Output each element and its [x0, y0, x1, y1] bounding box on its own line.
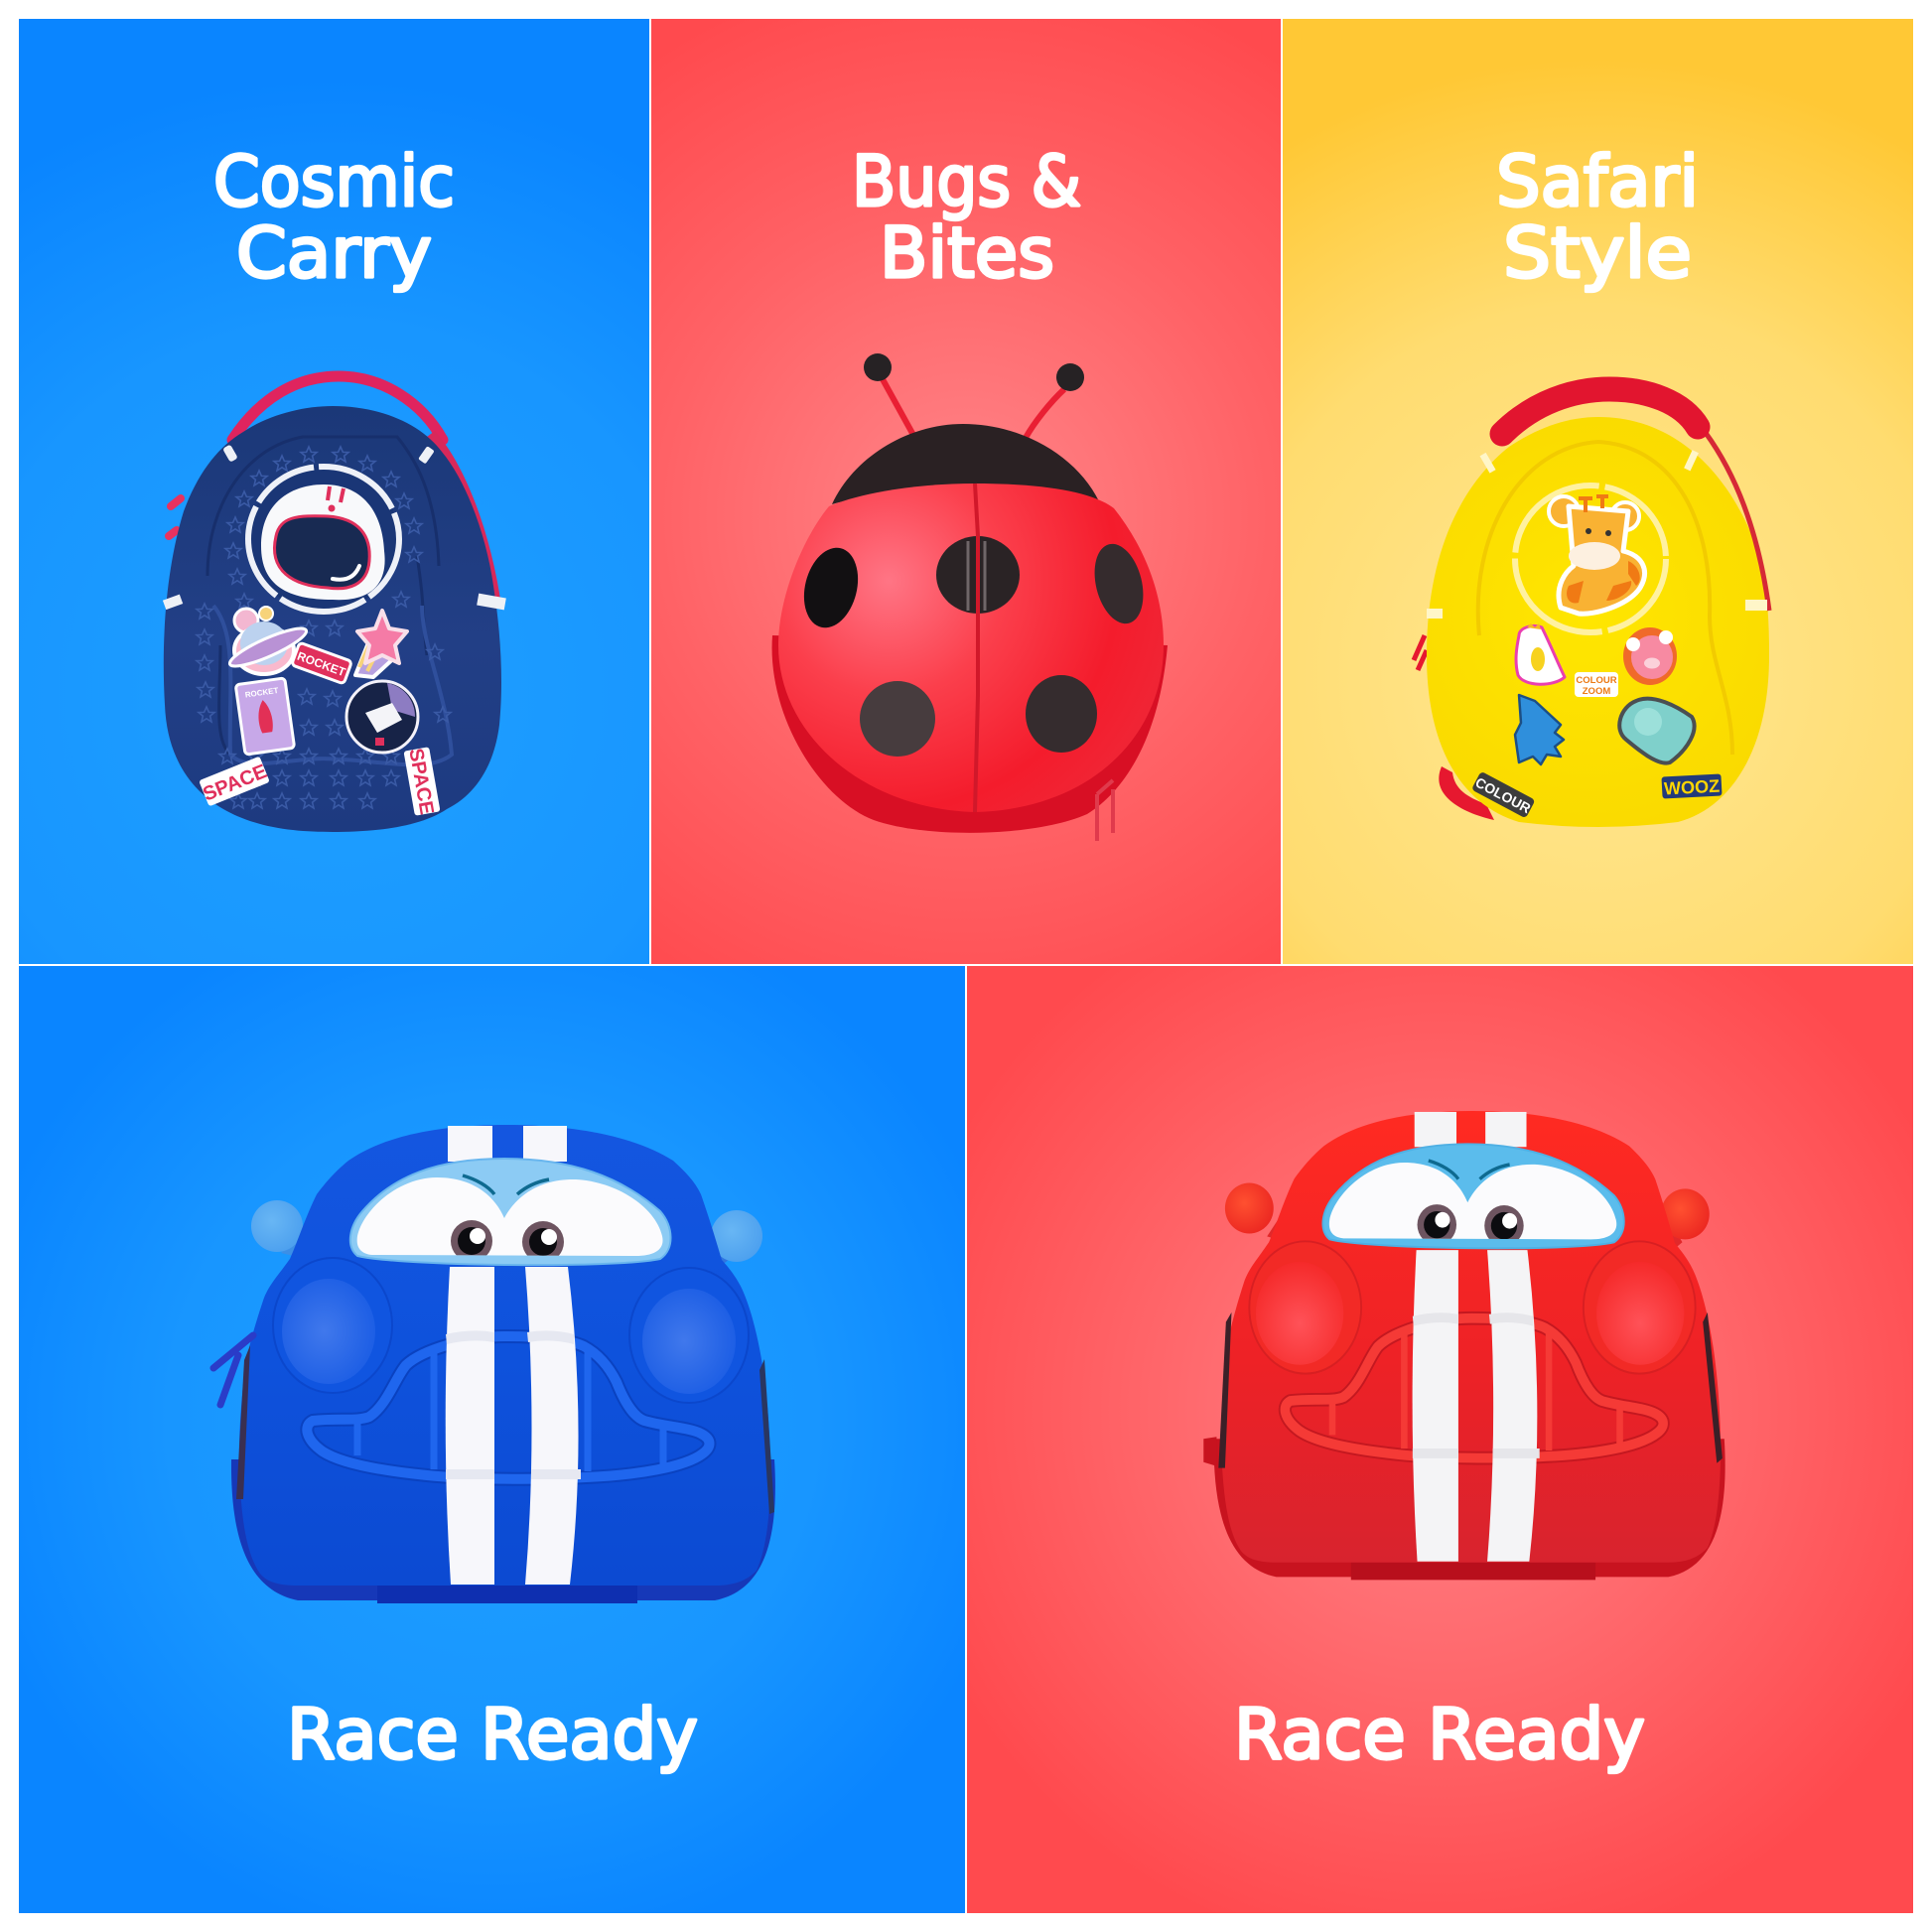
heading: Safari Style [1496, 141, 1699, 294]
sticker: shooting star [355, 611, 407, 677]
sticker: WOOZ: WOOZ [1664, 776, 1721, 798]
bonnet ridge [1285, 1318, 1663, 1458]
backpack: navy astronaut [163, 376, 506, 832]
sticker: SPACE left: SPACE [200, 760, 270, 806]
eyes [1418, 1204, 1524, 1239]
handle [1502, 389, 1698, 434]
sticker: hedgehog [1515, 695, 1564, 764]
sticker: COLOUR: COLOUR [1472, 774, 1534, 816]
heading: Cosmic Carry [213, 141, 455, 294]
backpack: ladybug [772, 353, 1168, 841]
sticker: chicken [1516, 623, 1565, 684]
panel: Race Ready red [967, 966, 1913, 1913]
backpack: yellow giraffe [1414, 389, 1769, 827]
sticker: pig [1623, 627, 1677, 685]
sticker: Colour Zoom: ZOOM [1583, 686, 1610, 697]
sticker: moon badge [346, 681, 418, 753]
side mesh [236, 1345, 250, 1499]
sticker: giraffe [1549, 496, 1645, 614]
backpack: red car [1203, 1111, 1725, 1580]
panel: Safari Style [1283, 19, 1913, 964]
roof stripes [1415, 1112, 1456, 1147]
antennae [864, 353, 1084, 438]
zipper pulls [213, 1335, 253, 1405]
mirror balls [251, 1200, 303, 1252]
astronaut helmet [248, 467, 399, 612]
fenders and headlights [273, 1258, 749, 1403]
heading: Race Ready: Race Ready [1234, 1694, 1645, 1775]
sticker: elephant [1619, 699, 1695, 763]
eyes [451, 1220, 564, 1256]
heading: Race Ready: Race Ready [287, 1694, 698, 1775]
heading: Cosmic Carry: Cosmic [213, 141, 455, 222]
windows [357, 1177, 663, 1256]
hood stripes [446, 1267, 494, 1585]
zipper pulls [1097, 780, 1113, 841]
heading: Bugs & Bites [852, 141, 1081, 294]
sticker: planet [226, 607, 310, 674]
pale marks [1427, 450, 1767, 619]
heading: Cosmic Carry: Carry [236, 212, 432, 294]
windshield [1322, 1144, 1624, 1248]
heading: Safari Style: Safari [1496, 141, 1699, 222]
hood stripes [1413, 1250, 1458, 1562]
panel: Bugs & Bites [651, 19, 1281, 964]
star texture [197, 447, 451, 808]
sticker: rocket card [235, 678, 295, 755]
roof stripes [448, 1126, 492, 1162]
backpack: blue car [213, 1125, 775, 1603]
moulded ridge [1478, 442, 1732, 755]
bonnet ridge [307, 1336, 709, 1479]
windshield [350, 1159, 671, 1265]
eyebrows [463, 1175, 549, 1194]
fenders and headlights [1249, 1241, 1696, 1374]
white marks [163, 444, 506, 610]
windows [1329, 1163, 1616, 1239]
panel: Race Ready blue [19, 966, 965, 1913]
heading: Bugs & Bites: Bites [880, 212, 1054, 294]
mirror balls [1225, 1183, 1274, 1233]
heading: Safari Style: Style [1503, 212, 1692, 294]
sticker: Colour Zoom [1575, 672, 1618, 697]
eyebrows [1429, 1161, 1510, 1179]
sticker: rocket label [292, 642, 351, 684]
sticker: SPACE right: SPACE [404, 747, 438, 816]
panel: Cosmic Carry [19, 19, 649, 964]
sticker: Colour Zoom: COLOUR [1576, 675, 1617, 686]
sticker: rocket label: ROCKET [295, 649, 347, 679]
side mesh [1218, 1312, 1231, 1468]
spots [796, 536, 1151, 757]
sticker: rocket card: ROCKET [244, 686, 279, 700]
heading: Bugs & Bites: Bugs & [852, 141, 1081, 222]
